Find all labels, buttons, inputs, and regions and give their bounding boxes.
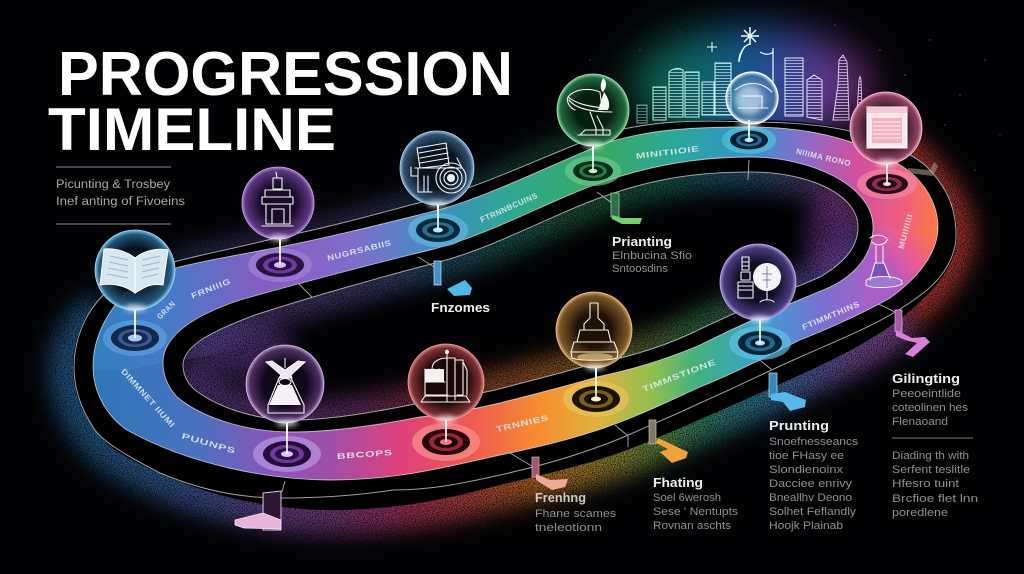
ribbon labels: DIMMNET IIUMI <box>119 367 177 430</box>
ribbon labels: NIIIMA RONO <box>795 147 852 168</box>
ribbon labels: FTRNNBCUINS <box>479 191 539 224</box>
subtitle block: Inef anting of Fivoeins <box>56 196 185 208</box>
callout: Gilingting: Hfesro tuint <box>892 478 959 490</box>
callout: Gilingting: Flenaoand <box>892 416 948 428</box>
sphere 3: camera and press <box>400 131 474 205</box>
title: TIMELINE <box>48 96 336 163</box>
ribbon labels <box>119 144 915 461</box>
ribbon labels: FRNIIIG <box>190 277 232 301</box>
ring 1 <box>103 305 167 356</box>
subtitle block: Picunting & Trosbey <box>56 179 170 191</box>
callout: Frenhng: tneleotionn <box>535 522 602 534</box>
sphere 5: city sphere <box>726 72 778 124</box>
connector icon: green block <box>611 193 642 224</box>
ribbon labels: FTIMMTHINS <box>801 299 861 332</box>
ribbon labels: TRNNIES <box>495 413 550 434</box>
ring 5 <box>722 120 776 154</box>
sphere 4: machine <box>557 74 629 146</box>
callout: Gilingting: Gilingting <box>892 372 960 386</box>
connector icon: blue block <box>434 261 472 296</box>
callout: Fhating: Rovnan aschts <box>653 520 732 532</box>
connector icon: magenta block <box>895 310 930 357</box>
connector icon: lamp stand <box>866 235 902 288</box>
ribbon labels: NUGRSABIIS <box>326 238 393 263</box>
ribbon labels: MINITIIOIE <box>635 144 700 161</box>
callout: Fnzomes: Fnzomes <box>431 301 490 315</box>
ribbon labels: GRAN <box>155 299 177 321</box>
connector icon: bottom stand <box>235 491 281 530</box>
connector icon: dim stand <box>908 162 938 176</box>
subtitle block <box>56 166 185 224</box>
callout: Frenhng: Frenhng <box>535 491 586 505</box>
callout: Prunting: tioe FHasy ee <box>769 450 844 462</box>
sphere 1: book <box>95 230 175 310</box>
track: gradient ribbon <box>93 127 938 480</box>
callout: Prianting <box>612 235 692 275</box>
callout: Prunting: Slondienoinx <box>769 464 844 476</box>
callout: Prunting: Solhet Feflandly <box>769 506 857 518</box>
ring 7 <box>729 316 791 360</box>
city skyline <box>637 55 862 123</box>
track: outer black lane <box>73 120 957 510</box>
ribbon labels: MUIIIIIII <box>897 213 915 250</box>
callout: Frenhng: Fhane scames <box>535 508 617 520</box>
callout: Prunting: Bneallhv Deono <box>769 492 852 504</box>
sphere 9: press machine <box>408 344 484 420</box>
title <box>48 40 513 163</box>
callout: Prianting: Elnbucina Sfio <box>612 250 692 262</box>
ring 4 <box>565 142 621 186</box>
background stars <box>589 24 1001 171</box>
ring 8 <box>563 367 629 417</box>
callout: Gilingting: Diading th with <box>892 450 969 462</box>
ring 9 <box>412 418 480 461</box>
callout: Gilingting: coteolinen hes <box>892 402 969 414</box>
callout: Prunting <box>769 419 859 532</box>
connector icon: pink block <box>532 457 568 490</box>
glow around track <box>73 27 957 510</box>
callout: Gilingting: Serfent teslitle <box>892 464 970 476</box>
callout: Prunting: Dacciee enrivy <box>769 478 853 490</box>
connector icon: orange block <box>649 420 688 463</box>
callout: Fhating <box>653 476 739 532</box>
pin flares at sphere bases <box>124 121 897 426</box>
sphere 2: temple <box>242 167 314 239</box>
sphere 10: flask <box>246 345 324 423</box>
title: PROGRESSION <box>58 40 513 109</box>
callout: Gilingting <box>892 372 978 519</box>
callout: Prianting: Sntoosdins <box>612 263 669 275</box>
callout: Fhating: Soel 6werosh <box>653 492 721 504</box>
callout: Gilingting: Peeoeintlide <box>892 388 961 400</box>
callout: Gilingting: Brcfioe flet lnn <box>892 493 978 505</box>
callout: Prunting: Snoefnesseancs <box>769 436 859 448</box>
sphere 8: bottle <box>556 292 632 368</box>
callout: Prunting: Prunting <box>769 419 829 433</box>
pins and base rings <box>103 120 917 472</box>
callout: Prunting: Hoojk Plainab <box>769 520 843 532</box>
star and dome <box>707 27 773 85</box>
callout: Prianting: Prianting <box>612 235 672 249</box>
callout: Frenhng <box>535 491 617 534</box>
callout: Fhating: Sese ' Nentupts <box>653 506 739 518</box>
track: thin guide lines <box>74 121 956 498</box>
ring 10 <box>253 422 321 472</box>
callout: Gilingting: poredlene <box>892 507 948 519</box>
ring 3 <box>408 200 468 247</box>
ribbon labels: PUUNPS <box>181 432 237 456</box>
ring 6 <box>857 160 917 199</box>
connector icon: sky block <box>769 373 806 411</box>
sphere 6: document <box>850 92 922 164</box>
sphere 7: tube and lamp <box>720 244 796 320</box>
ribbon labels: TIMMSTIONE <box>641 357 717 394</box>
ribbon labels: BBCOPS <box>337 448 393 461</box>
ring 2 <box>248 236 312 282</box>
callout: Fhating: Fhating <box>653 476 703 490</box>
